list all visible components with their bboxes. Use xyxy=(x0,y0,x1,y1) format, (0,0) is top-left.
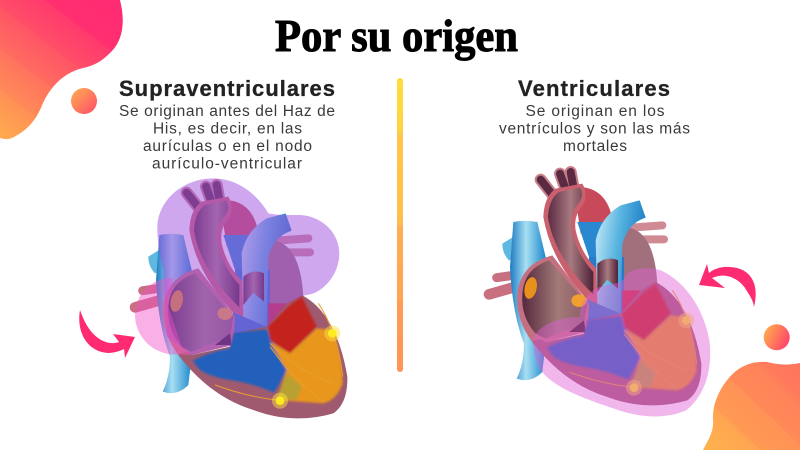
background blob: top left xyxy=(0,0,123,139)
text block: ventricular description: ventrículos y son las más xyxy=(499,120,690,138)
heading: Ventriculares: Ventriculares xyxy=(518,76,670,101)
text block: supraventricular description: aurículo-ventricular xyxy=(152,156,302,172)
text block: supraventricular description: aurículas o en el nodo xyxy=(143,138,312,155)
text block: ventricular description: mortales xyxy=(563,138,627,155)
divider bar xyxy=(397,78,403,372)
highlight: ventricular zone xyxy=(533,268,710,416)
background blob: bottom right xyxy=(703,362,800,450)
decorative circle: bottom right xyxy=(764,324,790,350)
arrow: pointing to supraventricular zone xyxy=(79,310,135,358)
text block: supraventricular description: His, es decir, en las xyxy=(153,120,302,138)
arrow: pointing to ventricular zone xyxy=(699,264,756,307)
illustration: heart with ventricular zone highlighted xyxy=(489,172,701,405)
text block: ventricular description: Se originan en los xyxy=(526,103,665,120)
illustration: heart with supraventricular zone highlighted xyxy=(135,178,347,418)
decorative circle: top left xyxy=(71,88,97,114)
text block: supraventricular description: Se originan antes del Haz de xyxy=(119,103,335,120)
highlight: supraventricular zone xyxy=(135,178,339,355)
heading: Supraventriculares: Supraventriculares xyxy=(119,76,335,101)
text block: supraventricular description xyxy=(119,103,335,172)
title: Por su origen xyxy=(275,11,518,61)
text block: ventricular description xyxy=(499,103,690,155)
